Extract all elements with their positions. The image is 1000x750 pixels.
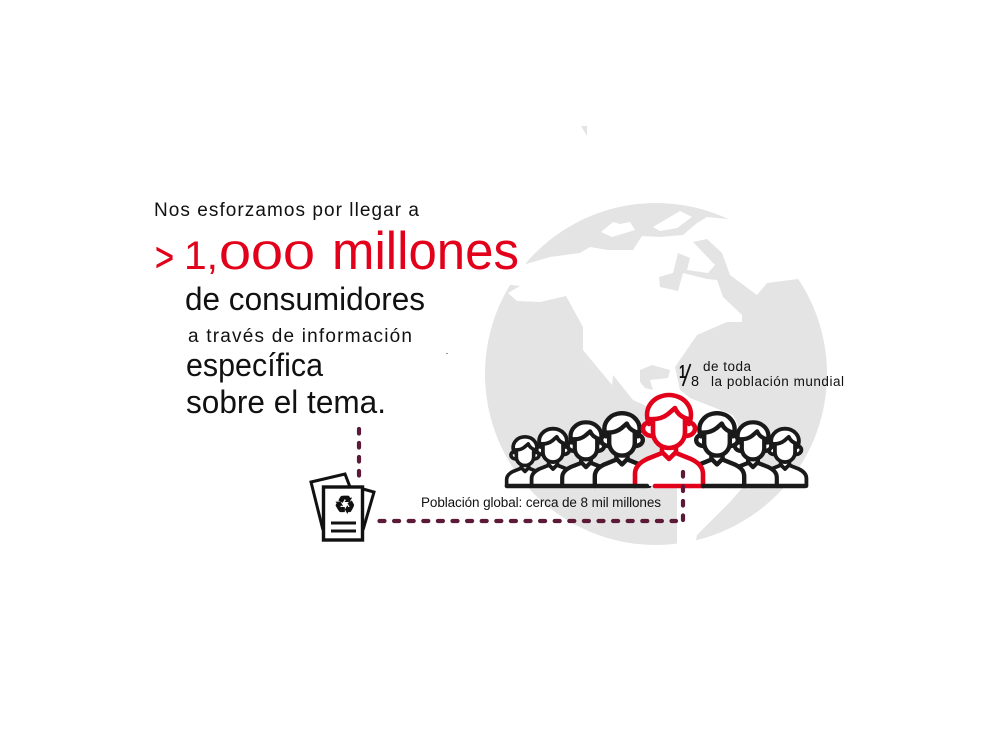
dashed connector: vertical from text to document	[357, 429, 361, 478]
callout line 2: la población mundial	[711, 374, 844, 389]
one comma: 1,	[184, 234, 218, 278]
land: northern continent	[526, 203, 728, 264]
ground line red	[655, 484, 703, 488]
globe top speck	[581, 126, 587, 136]
text: a traves de informacion: a través de información	[188, 326, 412, 347]
person 2	[532, 429, 574, 486]
land: eastern continent	[659, 239, 827, 540]
fraction: 1	[679, 362, 686, 382]
highlighted red person	[635, 395, 703, 486]
land: central island	[640, 365, 670, 390]
dashed connector: document to people	[380, 519, 676, 523]
label: global population: Población global: cerca de 8 mil millones	[421, 495, 661, 510]
fraction slash	[683, 364, 690, 386]
person 5	[690, 413, 744, 486]
callout line 1: de toda	[703, 359, 751, 374]
infographic canvas	[156, 126, 844, 545]
person 3	[562, 422, 610, 486]
chevron: >	[155, 234, 174, 280]
zeros: 000	[219, 234, 315, 278]
globe land masses	[485, 203, 827, 545]
millones: millones	[332, 222, 519, 281]
person 4	[595, 413, 649, 486]
ground line black left	[507, 484, 647, 488]
ground line black right	[703, 484, 805, 488]
text: especifica: específica	[186, 347, 323, 383]
back sheets	[311, 474, 374, 530]
icon: recycled document	[311, 474, 374, 540]
dashed connector: vertical into red person	[681, 472, 685, 522]
person 7	[764, 429, 806, 486]
people group	[507, 395, 806, 486]
person 1	[507, 437, 543, 486]
text: de consumidores: de consumidores	[185, 281, 425, 317]
recycle symbol: ♻	[334, 491, 356, 519]
text: sobre el tema: sobre el tema.	[186, 384, 386, 420]
sheet lines	[331, 523, 356, 531]
land: western continent	[485, 285, 677, 545]
person 6	[729, 422, 777, 486]
fraction denominator: 8	[691, 374, 699, 390]
intro line: Nos esforzamos por llegar a	[154, 200, 419, 221]
globe	[485, 126, 827, 545]
stray dot	[446, 353, 448, 354]
callout: one eighth	[679, 359, 844, 390]
headline number	[155, 222, 519, 281]
front sheet	[324, 487, 362, 540]
